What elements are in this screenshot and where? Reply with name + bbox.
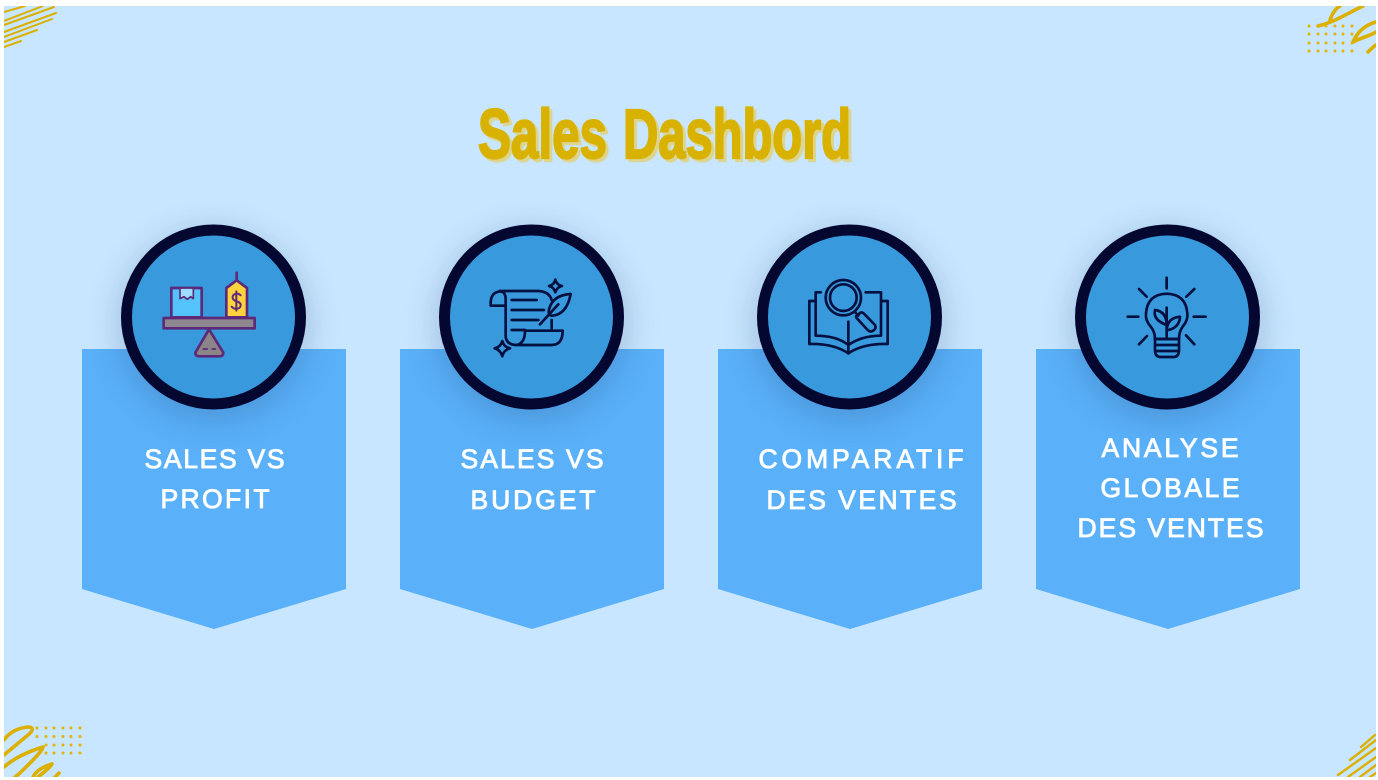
- label: sales vs budget: BUDGET: [470, 485, 596, 515]
- panel 3 circle shadow: [754, 229, 946, 421]
- panel 4 circle: [1080, 230, 1254, 404]
- panel 2 circle shadow: [436, 229, 628, 421]
- card: analyse globale des ventes: [1036, 229, 1300, 629]
- label: sales vs budget: SALES VS: [460, 444, 604, 474]
- panel 3 circle: [762, 230, 936, 404]
- title: [478, 95, 854, 176]
- icon: open book with magnifier: [809, 280, 888, 353]
- panel 1 circle: [126, 230, 300, 404]
- panel 3: [718, 349, 982, 629]
- label: analyse globale des ventes: GLOBALE: [1100, 473, 1240, 503]
- panel 4 circle shadow: [1072, 229, 1264, 421]
- card: sales vs profit: [82, 229, 346, 629]
- label: analyse globale des ventes: ANALYSE: [1102, 433, 1238, 463]
- decoration: top-right squiggle and dots: [1308, 6, 1376, 52]
- decoration: bottom-right stripes: [1338, 735, 1376, 777]
- decoration: top-left stripes: [4, 6, 56, 47]
- decoration: bottom-left squiggle and dots: [4, 726, 82, 777]
- card: sales vs budget: [400, 229, 664, 629]
- title: Dashbord: [626, 98, 854, 176]
- panel 1 circle shadow: [118, 229, 310, 421]
- title: Sales: [481, 98, 610, 176]
- panel 2 circle: [444, 230, 618, 404]
- panel 2: [400, 349, 664, 629]
- icon: scroll and quill: [491, 280, 571, 356]
- icon: light bulb with plant: [1128, 278, 1206, 357]
- label: sales vs profit: SALES VS: [144, 444, 284, 474]
- label: comparatif des ventes: DES VENTES: [766, 485, 956, 515]
- title: Sales: [478, 95, 607, 173]
- card: comparatif des ventes: [718, 229, 982, 629]
- label: sales vs profit: PROFIT: [160, 484, 270, 514]
- label: comparatif des ventes: COMPARATIF: [758, 444, 964, 474]
- panel 4: [1036, 349, 1300, 629]
- panel 1: [82, 349, 346, 629]
- title: Dashbord: [623, 95, 851, 173]
- label: analyse globale des ventes: DES VENTES: [1078, 513, 1264, 543]
- icon: balance scale with box and price tag: [164, 273, 255, 356]
